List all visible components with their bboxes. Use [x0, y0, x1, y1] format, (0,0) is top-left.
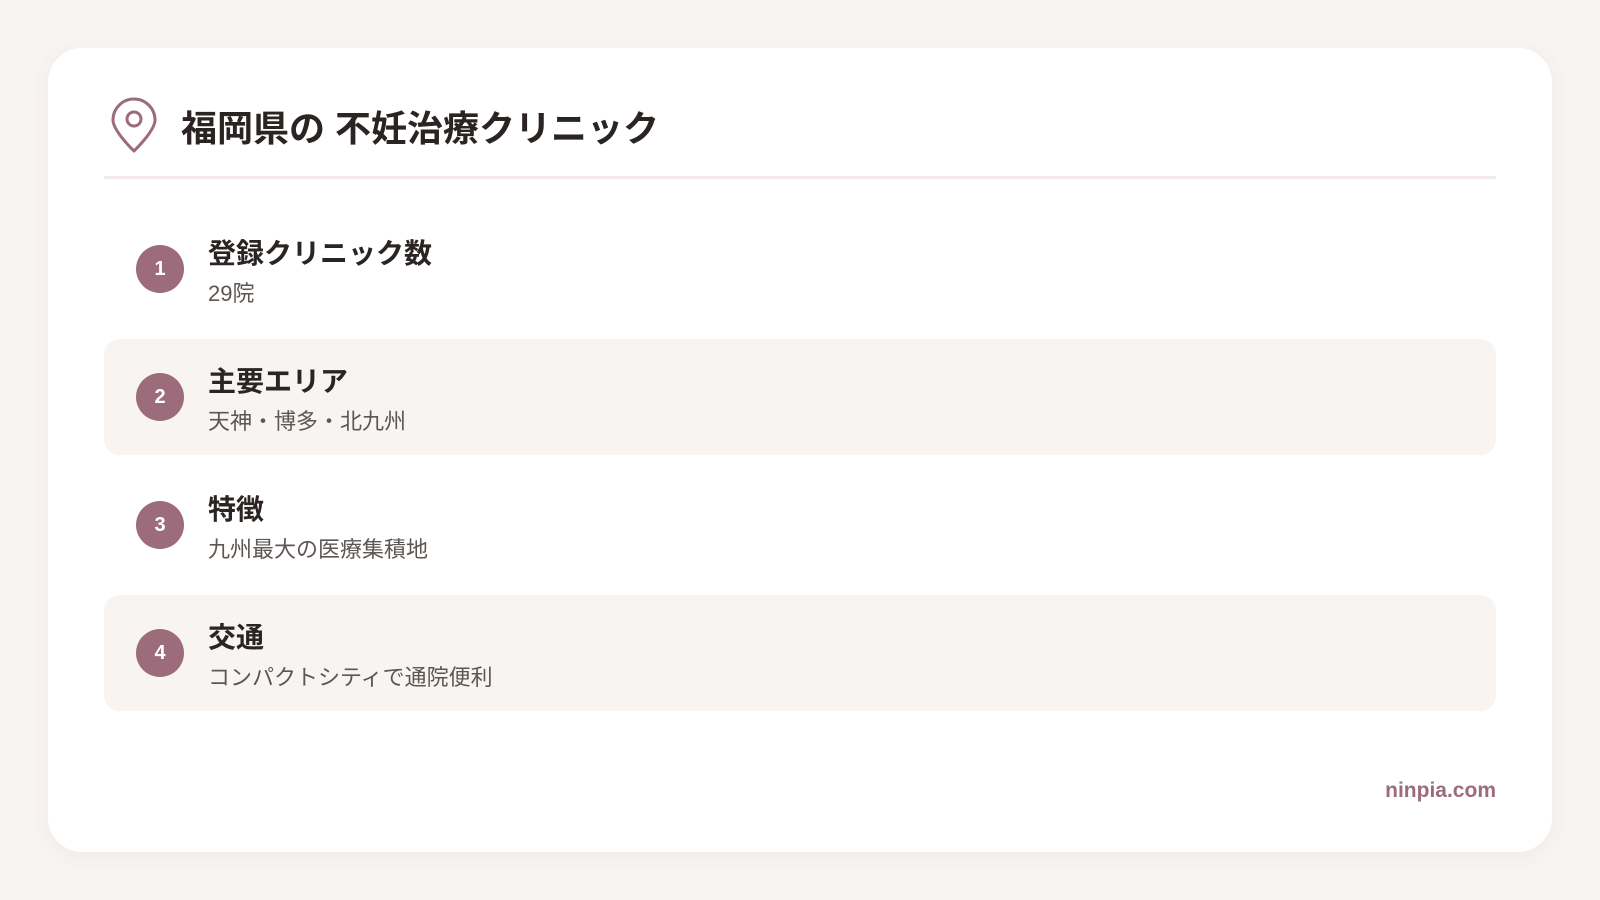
title	[112, 98, 659, 153]
row 2: areas: 2	[154, 386, 166, 408]
row 3: features: 3	[154, 514, 166, 536]
row 1: clinic count: 29院	[208, 281, 254, 306]
row 3: features: 九州最大の医療集積地	[208, 537, 428, 562]
row 4: transport: コンパクトシティで通院便利	[208, 665, 493, 690]
row 1: clinic count: 1	[154, 258, 166, 280]
row 2: areas: 天神・博多・北九州	[208, 409, 406, 434]
row 2: areas: 主要エリア	[208, 366, 348, 397]
row 4: transport: 交通	[208, 622, 264, 653]
row 3: features	[136, 494, 428, 562]
row 4: transport	[104, 595, 1496, 711]
row 2: areas	[104, 339, 1496, 455]
icon: map pin	[112, 98, 156, 153]
row 4: transport: 4	[154, 642, 166, 664]
row 1: clinic count: 登録クリニック数	[208, 238, 432, 269]
row 3: features: 特徴	[208, 494, 264, 525]
title: 福岡県の 不妊治療クリニック	[181, 108, 659, 149]
row 1: clinic count	[136, 238, 432, 306]
footer: ninpia.com	[1385, 779, 1496, 802]
